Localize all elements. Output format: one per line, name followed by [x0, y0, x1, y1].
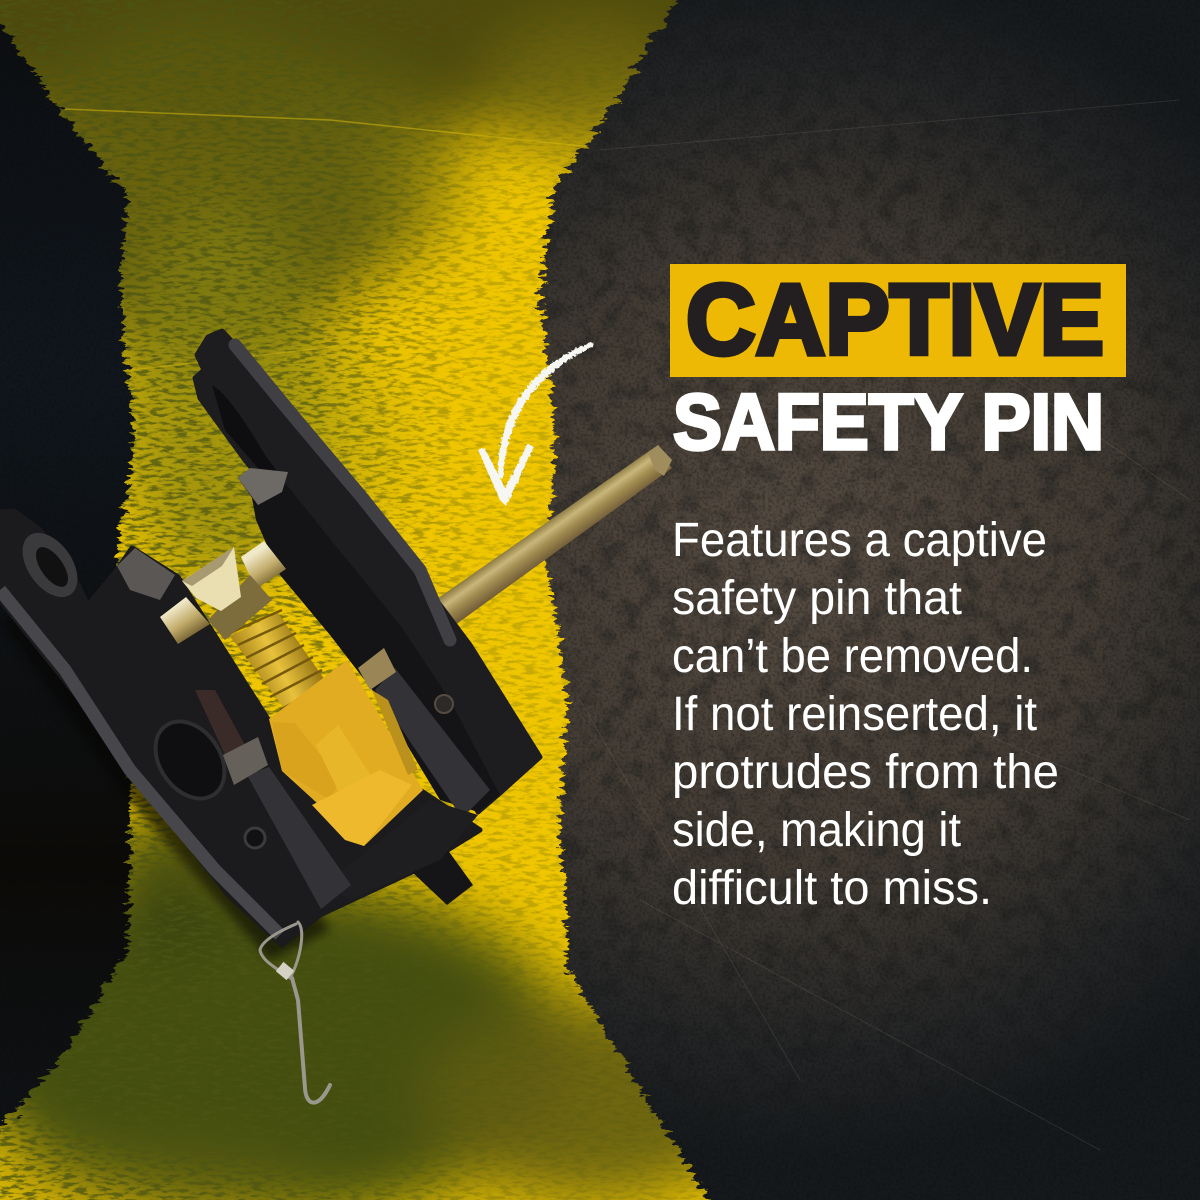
illustration: trolley clamp with safety pin	[0, 331, 672, 1103]
front plate	[0, 511, 480, 945]
pin head collar	[208, 575, 272, 640]
back plate highlight	[235, 345, 450, 640]
front plate rim highlight	[0, 590, 280, 935]
stud	[358, 648, 396, 690]
bottom foot	[412, 842, 473, 905]
inner flat bar	[247, 767, 351, 909]
spring	[230, 610, 336, 723]
safety pin	[434, 445, 672, 628]
lobe ring	[11, 523, 89, 607]
body text: side, making it	[672, 804, 961, 857]
bolt	[435, 695, 453, 713]
body text	[672, 514, 1059, 915]
tip stub	[117, 548, 175, 600]
bolt lower	[245, 828, 265, 848]
body text: If not reinserted, it	[672, 688, 1037, 741]
pin head	[182, 547, 241, 611]
yellow block	[269, 660, 423, 846]
steel spacer	[223, 737, 268, 785]
body text: difficult to miss.	[672, 862, 992, 915]
lower block	[325, 800, 478, 900]
heading: CAPTIVE on yellow label: CAPTIVE	[686, 264, 1104, 376]
bracket tip	[238, 468, 288, 505]
back plate	[195, 331, 540, 812]
inner plate flat face	[375, 668, 490, 818]
machine shadow	[0, 590, 330, 960]
body text: Features a captive	[672, 514, 1047, 567]
body text: can’t be removed.	[672, 630, 1033, 683]
plate hole	[141, 708, 239, 812]
icon: white chalk arrow	[478, 342, 593, 506]
inner plate with bracket	[238, 468, 500, 812]
hook wire	[260, 922, 330, 1103]
rear crossbar	[160, 597, 210, 644]
back plate lobe opening	[212, 385, 282, 478]
body text: safety pin that	[672, 572, 962, 625]
yellow paint band	[0, 0, 711, 1200]
body text: protrudes from the	[672, 746, 1059, 799]
heading: SAFETY PIN: SAFETY PIN	[673, 377, 1104, 466]
maroon bar	[195, 690, 245, 755]
